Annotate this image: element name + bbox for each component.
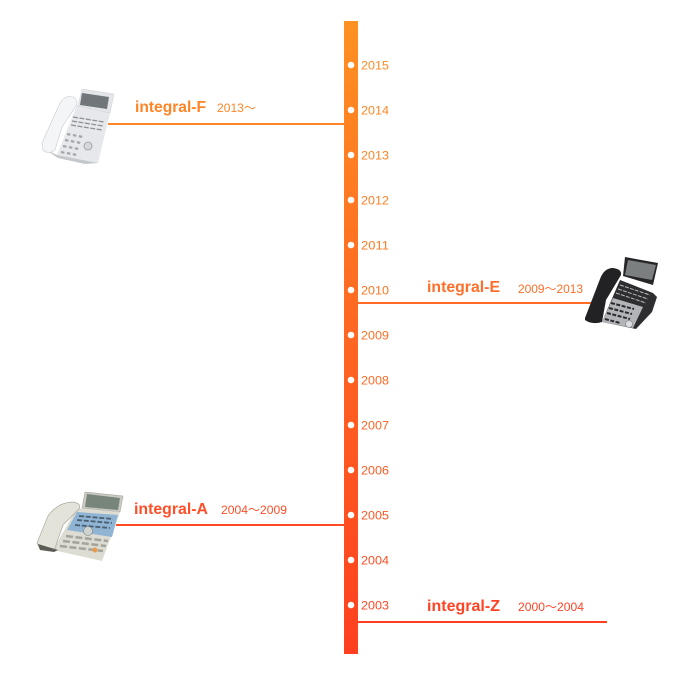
year 2005: 2005 bbox=[361, 508, 389, 522]
year 2009 bbox=[348, 328, 389, 342]
dates integral-F: 2013～ bbox=[217, 101, 256, 115]
entry: integral-F bbox=[42, 89, 344, 164]
year 2006 bbox=[348, 464, 389, 478]
connector line E bbox=[358, 302, 594, 304]
year markers bbox=[348, 58, 389, 612]
entry: integral-Z bbox=[358, 598, 607, 623]
year 2013 bbox=[348, 148, 389, 162]
year 2003: 2003 bbox=[361, 598, 389, 612]
heading integral-E: integral-E bbox=[427, 279, 500, 296]
year 2010: 2010 bbox=[361, 284, 389, 298]
year 2012: 2012 bbox=[361, 194, 389, 208]
year 2007: 2007 bbox=[361, 418, 389, 432]
heading integral-Z: integral-Z bbox=[427, 598, 501, 615]
timeline bar bbox=[344, 21, 358, 654]
year 2012 bbox=[348, 194, 389, 208]
icon: white phone bbox=[42, 89, 114, 164]
year 2009: 2009 bbox=[361, 328, 389, 342]
year 2007 bbox=[348, 418, 389, 432]
year 2013: 2013 bbox=[361, 148, 389, 162]
year 2015 bbox=[348, 58, 389, 72]
connector line A bbox=[116, 524, 344, 526]
entry: integral-E bbox=[358, 257, 658, 329]
year 2004: 2004 bbox=[361, 554, 389, 568]
entry: integral-A bbox=[37, 492, 344, 561]
year 2005 bbox=[348, 508, 389, 522]
year 2014 bbox=[348, 104, 389, 118]
year 2008 bbox=[348, 374, 389, 388]
dates integral-Z: 2000～2004 bbox=[518, 600, 584, 614]
year 2011: 2011 bbox=[361, 238, 389, 252]
year 2011 bbox=[348, 238, 389, 252]
year 2010 bbox=[348, 284, 389, 298]
connector line F bbox=[108, 123, 344, 125]
connector line Z bbox=[358, 621, 607, 623]
heading integral-F: integral-F bbox=[135, 99, 206, 116]
year 2015: 2015 bbox=[361, 58, 389, 72]
heading integral-A: integral-A bbox=[134, 501, 208, 518]
icon: beige phone with blue keypad bbox=[37, 492, 123, 561]
year 2006: 2006 bbox=[361, 464, 389, 478]
year 2003 bbox=[348, 598, 389, 612]
dates integral-E: 2009～2013 bbox=[518, 282, 583, 296]
year 2004 bbox=[348, 554, 389, 568]
dates integral-A: 2004～2009 bbox=[221, 503, 287, 517]
icon: black phone bbox=[585, 257, 658, 329]
year 2008: 2008 bbox=[361, 374, 389, 388]
year 2014: 2014 bbox=[361, 104, 389, 118]
